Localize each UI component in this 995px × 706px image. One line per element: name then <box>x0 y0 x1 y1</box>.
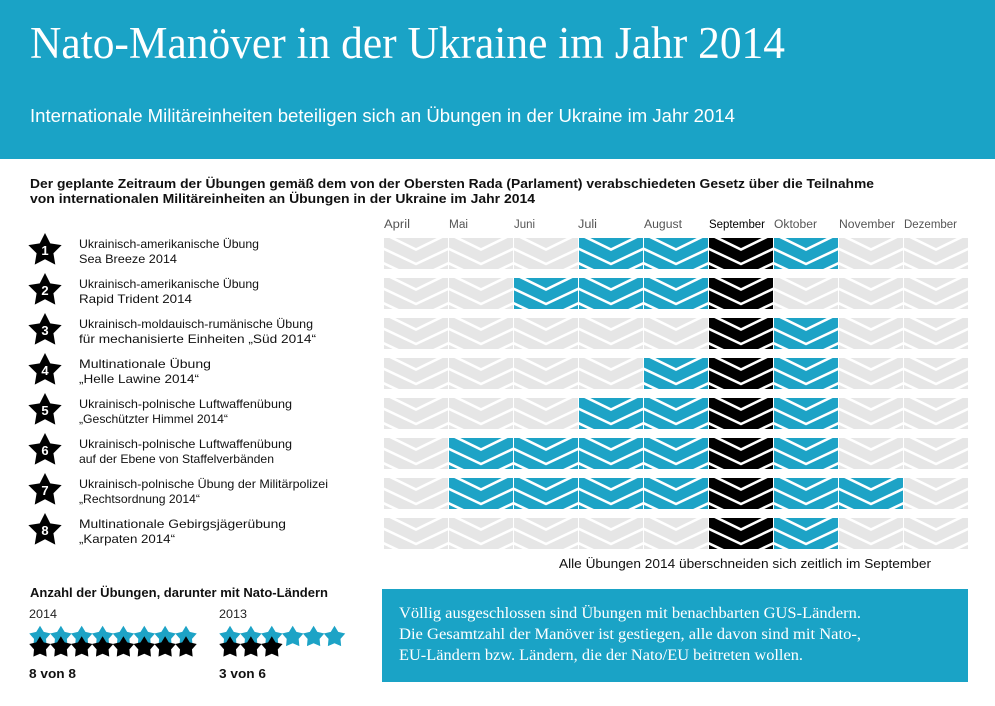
label 5: „Geschützter Himmel 2014“ <box>79 412 228 426</box>
exercise 5 row <box>28 393 970 438</box>
label 5 <box>79 397 292 426</box>
result 2014: 8 von 8 <box>29 666 76 681</box>
chart heading <box>30 176 874 206</box>
label 7: Ukrainisch-polnische Übung der Militärpolizei <box>79 477 328 491</box>
stars 2014: total <box>29 626 197 646</box>
star badge 1 <box>28 233 62 265</box>
count heading: Anzahl der Übungen, darunter mit Nato-Ländern <box>30 585 328 600</box>
timeline 4 <box>382 353 970 398</box>
month labels: August <box>644 219 683 231</box>
header banner <box>0 0 995 159</box>
callout: EU-Ländern bzw. Ländern, die der Nato/EU beitreten wollen. <box>399 647 803 664</box>
title: Nato-Manöver in der Ukraine im Jahr 2014 <box>30 18 785 68</box>
label 8: „Karpaten 2014“ <box>79 532 175 546</box>
exercise 3 row <box>28 313 970 358</box>
month labels: November <box>839 219 895 231</box>
star badge 3: 3 <box>41 323 49 338</box>
star badge 4: 4 <box>41 363 49 378</box>
star badge 4 <box>28 353 62 385</box>
label 4: „Helle Lawine 2014“ <box>79 372 199 386</box>
exercise 7 row <box>28 473 970 518</box>
exercise 8 row <box>28 513 970 558</box>
timeline 8 <box>382 513 970 558</box>
star badge 7 <box>28 473 62 505</box>
callout: Völlig ausgeschlossen sind Übungen mit benachbarten GUS-Ländern. <box>399 604 861 622</box>
label 3: Ukrainisch-moldauisch-rumänische Übung <box>79 317 313 331</box>
label 4: Multinationale Übung <box>79 357 211 371</box>
exercise 6 row <box>28 433 970 478</box>
label 3 <box>79 317 316 346</box>
timeline 2 <box>382 273 970 318</box>
label 5: Ukrainisch-polnische Luftwaffenübung <box>79 397 292 411</box>
month labels: September <box>709 219 765 231</box>
label 6: auf der Ebene von Staffelverbänden <box>79 452 274 466</box>
year 2013 label: 2013 <box>219 609 247 621</box>
label 8: Multinationale Gebirgsjägerübung <box>79 517 286 531</box>
star badge 7: 7 <box>41 483 49 498</box>
star badge 6 <box>28 433 62 465</box>
panel: exercise count <box>29 585 345 681</box>
chart heading: Der geplante Zeitraum der Übungen gemäß dem von der Obersten Rada (Parlament) verabschiedeten Gesetz über die Teilnahme <box>30 176 874 191</box>
month labels: April <box>384 219 410 231</box>
result 2013: 3 von 6 <box>219 666 266 681</box>
month labels: Dezember <box>904 219 957 231</box>
label 7: „Rechtsordnung 2014“ <box>79 492 200 506</box>
label 1 <box>79 237 259 266</box>
timeline 5 <box>382 393 970 438</box>
timeline 1 <box>382 233 970 278</box>
label 2: Rapid Trident 2014 <box>79 292 192 306</box>
exercise 2 row <box>28 273 970 318</box>
star badge 3 <box>28 313 62 345</box>
subtitle: Internationale Militäreinheiten beteiligen sich an Übungen in der Ukraine im Jahr 2014 <box>30 105 735 126</box>
chart caption: Alle Übungen 2014 überschneiden sich zeitlich im September <box>559 557 931 571</box>
exercise 1 row <box>28 233 970 278</box>
callout: Die Gesamtzahl der Manöver ist gestiegen, alle davon sind mit Nato-, <box>399 626 861 643</box>
timeline 7 <box>382 473 970 518</box>
chart heading: von internationalen Militäreinheiten an Übungen in der Ukraine im Jahr 2014 <box>30 191 535 206</box>
star badge 2 <box>28 273 62 305</box>
label 2: Ukrainisch-amerikanische Übung <box>79 277 259 291</box>
label 6 <box>79 437 292 466</box>
timeline 3 <box>382 313 970 358</box>
month labels: Juli <box>578 219 597 231</box>
callout <box>382 589 968 682</box>
stars 2013: with Nato <box>219 636 283 657</box>
timeline 6 <box>382 433 970 478</box>
label 3: für mechanisierte Einheiten „Süd 2014“ <box>79 332 316 346</box>
star badge 2: 2 <box>41 283 49 298</box>
star badge 5: 5 <box>41 403 49 418</box>
label 4 <box>79 357 211 386</box>
label 1: Sea Breeze 2014 <box>79 252 177 266</box>
star badge 8 <box>28 513 62 545</box>
label 2 <box>79 277 259 306</box>
stars 2013: total <box>219 626 345 646</box>
month labels: Juni <box>514 219 535 231</box>
stars 2014: with Nato <box>29 636 197 657</box>
star badge 1: 1 <box>41 243 49 258</box>
month labels: Oktober <box>774 219 817 231</box>
month labels <box>384 219 957 231</box>
month labels: Mai <box>449 219 468 231</box>
label 7 <box>79 477 328 506</box>
label 1: Ukrainisch-amerikanische Übung <box>79 237 259 251</box>
star badge 6: 6 <box>41 443 49 458</box>
label 8 <box>79 517 286 546</box>
exercise 4 row <box>28 353 970 398</box>
star badge 5 <box>28 393 62 425</box>
year 2014 label: 2014 <box>29 609 58 621</box>
label 6: Ukrainisch-polnische Luftwaffenübung <box>79 437 292 451</box>
star badge 8: 8 <box>41 523 49 538</box>
